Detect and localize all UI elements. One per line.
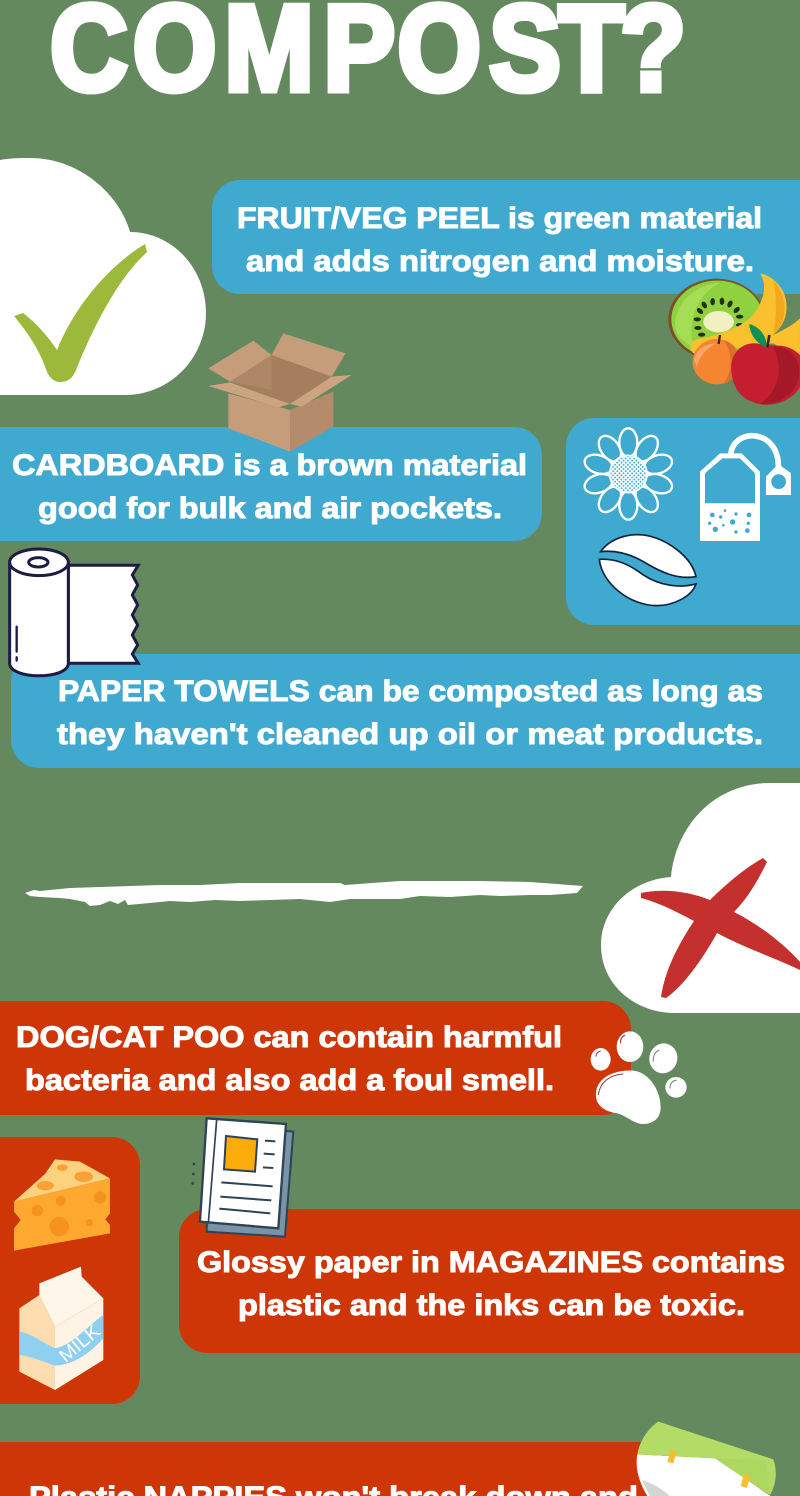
panel: paper towels [11, 654, 800, 768]
text: fruit and veg peel: and adds nitrogen and moisture. [246, 245, 754, 278]
icon: green check mark [14, 244, 147, 382]
icon: nappy [637, 1422, 776, 1496]
text: glossy magazines: Glossy paper in MAGAZINES contains [197, 1246, 785, 1279]
brush stroke divider [25, 881, 583, 906]
text: paper towels: they haven't cleaned up oil or meat products. [57, 718, 763, 751]
panel: fruit and veg peel [212, 180, 800, 294]
icon: paper towel roll [10, 549, 138, 676]
text: dog and cat poo: bacteria and also add a foul smell. [25, 1064, 554, 1097]
text: cardboard: good for bulk and air pockets. [38, 492, 502, 525]
panel: plastic nappies [0, 1422, 776, 1496]
icon: flower [582, 428, 675, 520]
text: cardboard: CARDBOARD is a brown material [12, 449, 527, 482]
icon: tea bag [700, 436, 791, 541]
icon: cross cloud [601, 783, 800, 1013]
icon: coffee bean [599, 535, 696, 606]
panel: flower, tea bag and coffee bean [566, 418, 800, 625]
icon: cheese [14, 1159, 110, 1251]
icon: tick cloud [0, 158, 206, 395]
text: glossy magazines: plastic and the inks can be toxic. [238, 1289, 745, 1322]
icon: magazine [191, 1118, 293, 1237]
text: dog and cat poo [16, 1021, 562, 1097]
icon: red cross [641, 858, 800, 998]
text: cardboard [12, 449, 527, 525]
text: fruit and veg peel [237, 202, 762, 278]
text: dog and cat poo: DOG/CAT POO can contain harmful [16, 1021, 562, 1054]
icon: paw print [591, 1031, 687, 1124]
panel: cardboard [0, 427, 542, 541]
panel: glossy magazines [179, 1209, 800, 1353]
text: glossy magazines [197, 1246, 785, 1322]
icon: cardboard box [208, 333, 352, 452]
text: fruit and veg peel: FRUIT/VEG PEEL is green material [237, 202, 762, 235]
text: paper towels: PAPER TOWELS can be composted as long as [58, 675, 763, 708]
icon: milk carton [19, 1267, 104, 1390]
icon: milk carton: MILK [55, 1320, 104, 1366]
panel: dog and cat poo [0, 1001, 631, 1115]
panel: cheese and milk [0, 1137, 140, 1404]
icon: fruit [668, 273, 800, 405]
text: paper towels [57, 675, 763, 751]
